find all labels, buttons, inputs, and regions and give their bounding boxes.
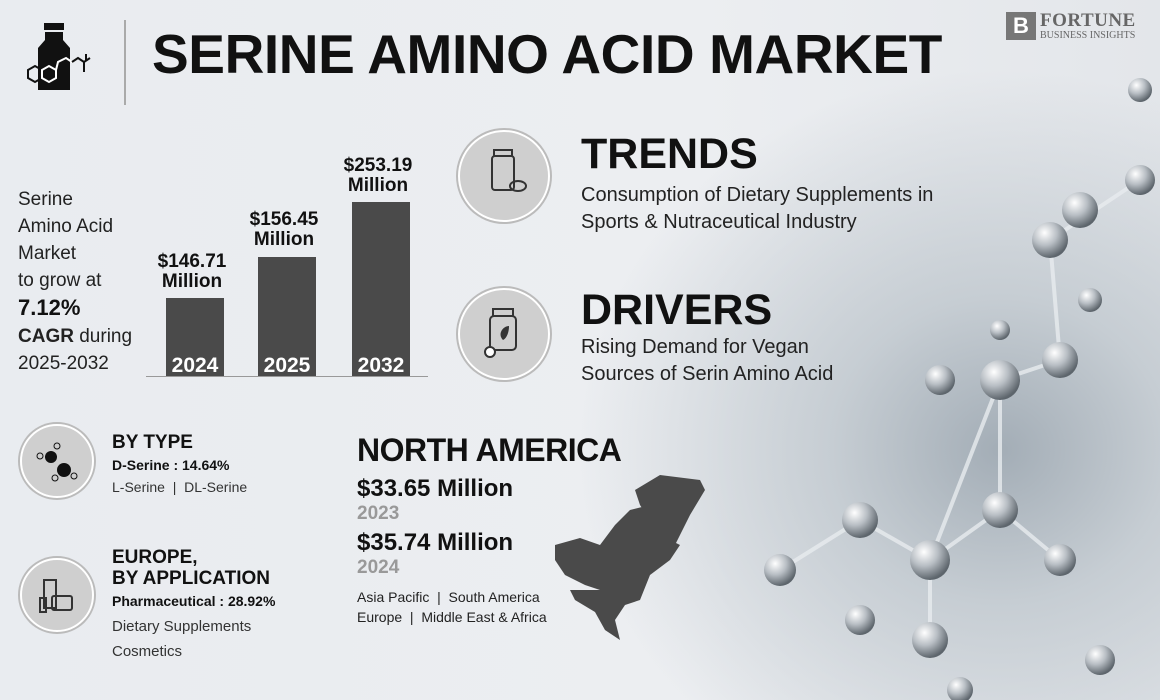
map: north america [555,475,705,640]
application text: Dietary Supplements [112,618,251,635]
trends text: Sports & Nutraceutical Industry [581,211,857,233]
bar chart: $253.19 [344,155,412,176]
trends text: Consumption of Dietary Supplements in [581,184,933,206]
text: CAGR [18,189,132,374]
north america block: $33.65 Million [357,475,513,502]
bar chart: 2032 [358,354,404,377]
trends text [581,184,933,233]
drivers text: Sources of Serin Amino Acid [581,363,833,385]
application text: Cosmetics [112,643,182,660]
by type text: L-Serine | DL-Serine [112,479,247,495]
icon: bottle with molecule [27,23,90,90]
text: CAGR: to grow at [18,270,101,291]
icon: application [20,558,94,632]
text: CAGR: CAGR during [18,326,132,347]
by type text: BY TYPE [112,432,193,453]
north america block: 2023 [357,503,399,524]
bar chart: Million [254,229,314,250]
north america block: NORTH AMERICA [357,432,621,468]
logo: BUSINESS INSIGHTS [1040,30,1135,41]
north america block: Europe | Middle East & Africa [357,609,547,625]
text: CAGR: 2025-2032 [18,353,109,374]
icon: trends [458,130,550,222]
text: CAGR: Amino Acid [18,216,113,237]
logo: FORTUNE [1040,10,1136,31]
logo: B [1013,13,1029,38]
bar chart [146,155,428,377]
text: CAGR: Serine [18,189,73,210]
bar chart: $156.45 [250,209,318,230]
north america block [357,432,621,625]
north america block: 2024 [357,557,399,578]
trends heading: TRENDS [581,130,758,178]
title: SERINE AMINO ACID MARKET [152,23,942,85]
icon: by type [20,424,94,498]
application text: BY APPLICATION [112,568,270,589]
text: CAGR: 7.12% [18,295,80,320]
bar chart: $146.71 [158,251,226,272]
north america block: $35.74 Million [357,529,513,556]
text: CAGR: Market [18,243,76,264]
bar chart: 2025 [264,354,310,377]
bar chart: 2024 [172,354,218,377]
logo [1006,10,1136,41]
bar chart: Million [348,175,408,196]
application text: Pharmaceutical : 28.92% [112,593,275,609]
by type text: D-Serine : 14.64% [112,457,230,473]
icon: drivers [458,288,550,380]
molecule background [764,78,1155,700]
by type text [112,432,247,495]
divider [124,20,126,105]
application text [112,547,276,660]
drivers text: Rising Demand for Vegan [581,336,809,358]
bar chart: Million [162,271,222,292]
north america block: Asia Pacific | South America [357,589,540,605]
drivers text [581,336,833,385]
drivers heading: DRIVERS [581,286,772,334]
application text: EUROPE, [112,547,198,568]
